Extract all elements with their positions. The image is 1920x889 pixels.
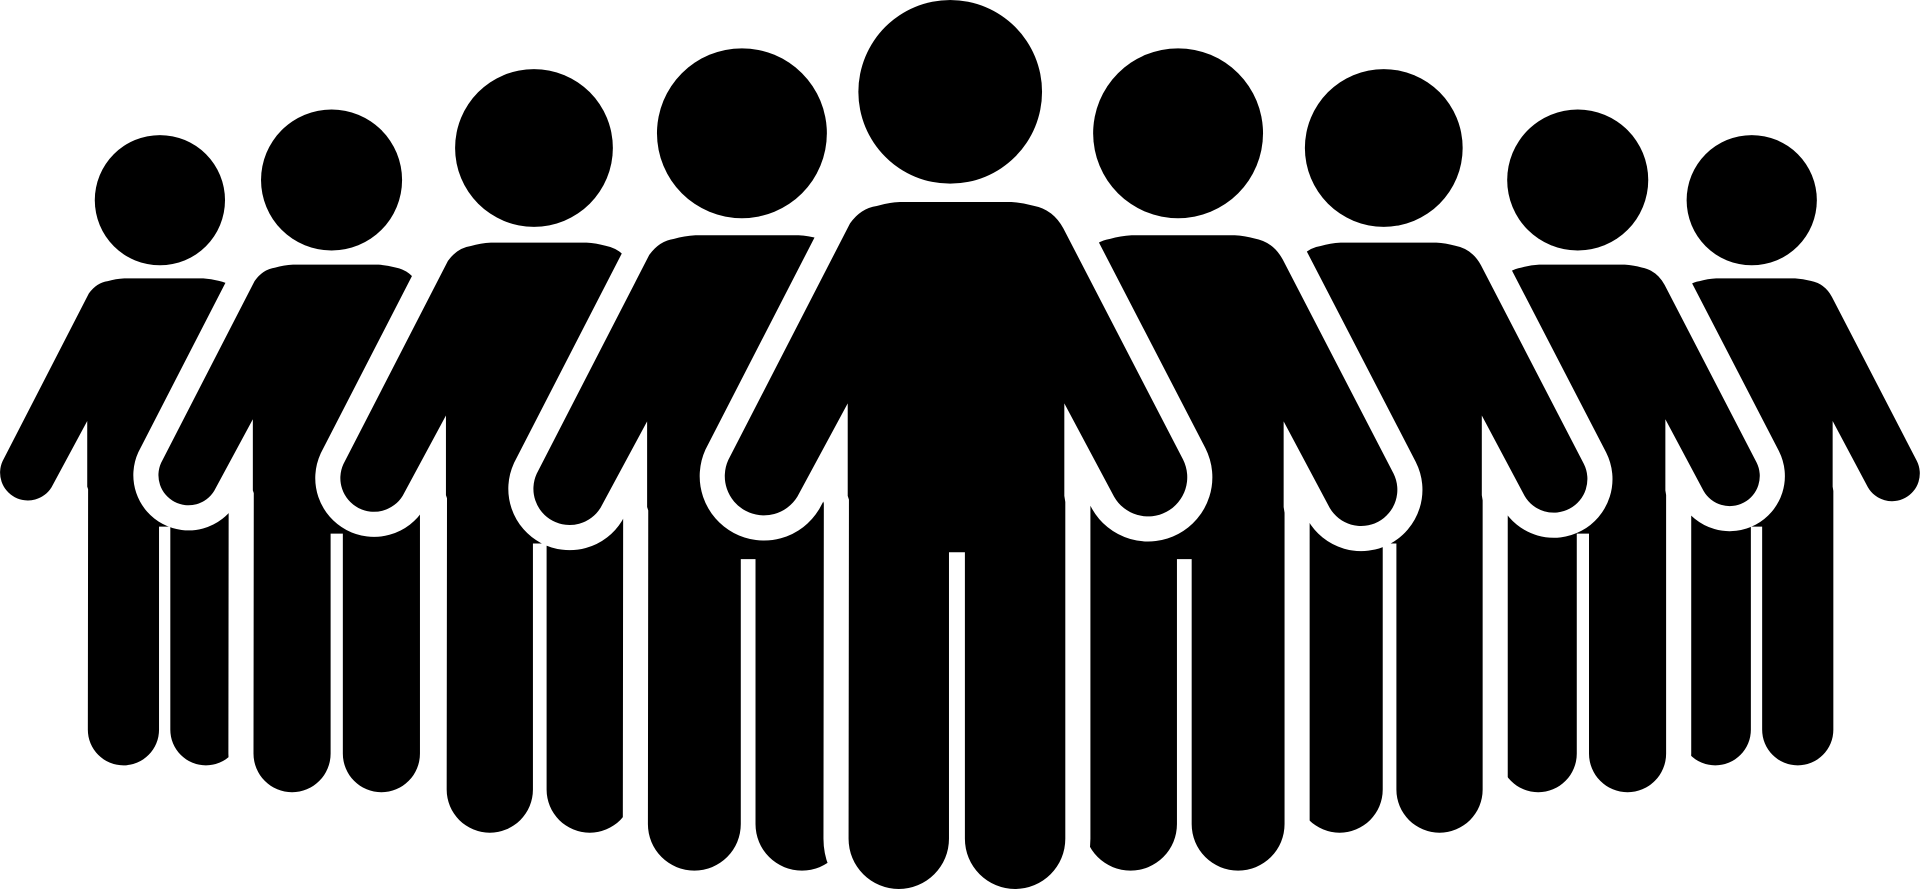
person 5: centre, largest [725,0,1187,889]
person 3: third from left [340,69,738,833]
person 6: right of centre [970,48,1397,871]
person 4: left of centre [533,48,961,871]
person 1: far left, smallest [0,135,328,765]
person 7: third from right [1190,69,1587,833]
person 9: far right, smallest [1592,135,1920,765]
person 8: second from right [1405,109,1760,792]
person 2: second from left [158,109,514,792]
